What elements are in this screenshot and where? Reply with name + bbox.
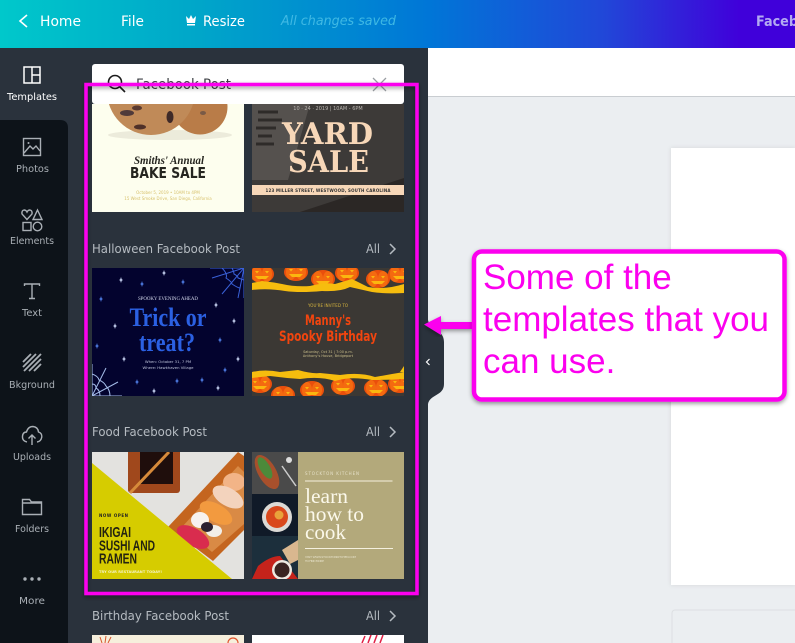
nav item: photos: Photos — [16, 164, 49, 175]
menu: home: Home — [40, 14, 81, 30]
template card: birthday right, cropped — [252, 635, 404, 643]
wooden sushi tray — [168, 452, 244, 561]
cook eyebrow: STOCKTON KITCHEN — [305, 471, 359, 476]
trick or treat headline: Trick or — [130, 303, 206, 332]
template card: bake sale — [92, 104, 244, 212]
icon: clear search — [373, 78, 386, 91]
arrow pointing to templates — [424, 316, 472, 335]
nav item: photos — [16, 138, 49, 175]
section heading: food: Food Facebook Post — [92, 425, 207, 439]
menu: file: File — [121, 14, 144, 30]
template card: trick or treat — [92, 268, 244, 396]
soy sauce dish — [128, 448, 180, 493]
pumpkins: bottom — [252, 376, 404, 396]
sushi eyebrow: NOW OPEN — [99, 513, 128, 518]
template card: learn how to cook: TO FIND MORE — [304, 559, 324, 563]
section heading: halloween — [92, 242, 395, 256]
yard sale headline: YARD — [281, 117, 373, 152]
callout text: Some of the — [483, 258, 672, 297]
next blank page outline — [672, 610, 795, 643]
nav item: more: More — [19, 596, 45, 607]
callout — [474, 252, 784, 400]
yellow ribbon: top — [252, 279, 404, 293]
template card: trick or treat: treat? — [139, 328, 195, 357]
nav item: text — [21, 284, 42, 319]
spider web: bottom left — [92, 364, 122, 396]
icon: collapse chevron — [426, 359, 430, 365]
stars — [95, 270, 240, 394]
template card: sushi — [92, 448, 247, 579]
template card: yard sale: 123 MILLER STREET, WESTWOOD, SOUTH CAROLINA — [266, 188, 391, 193]
icon: back chevron — [20, 15, 27, 27]
template card: yard sale — [252, 104, 404, 212]
sushi pieces — [223, 473, 245, 491]
callout text: templates that you — [483, 300, 769, 339]
nav item: folders: Folders — [15, 524, 49, 535]
icon: crown — [186, 15, 196, 26]
bake sale script line: Smiths' Annual — [134, 153, 205, 167]
template card: spooky birthday: Spooky Birthday — [279, 329, 377, 345]
pumpkins: top — [252, 268, 404, 288]
chopsticks — [130, 452, 169, 493]
template card: sushi: RAMEN — [99, 550, 137, 568]
search box — [92, 64, 404, 104]
section heading: birthday: All — [366, 609, 380, 623]
section heading: birthday — [92, 609, 395, 623]
nav item: background — [9, 354, 55, 391]
template card: birthday left, cropped — [92, 635, 244, 643]
section heading: halloween: Halloween Facebook Post — [92, 242, 240, 256]
template card: sushi: TRY OUR RESTAURANT TODAY! — [99, 570, 162, 574]
sushi headline: IKIGAI — [99, 524, 131, 541]
nav item: uploads — [13, 426, 51, 463]
template card: spooky birthday — [252, 268, 404, 396]
template card: spooky birthday: Anthony's House, Bridgeport — [303, 354, 354, 358]
template card: yard sale: SALE — [288, 145, 369, 180]
food photo: bottom — [252, 536, 298, 579]
nav item: elements — [10, 210, 54, 247]
template card: yard sale: 10 · 24 · 2019 | 10AM - 6PM — [293, 106, 363, 112]
nav item: templates: Templates — [6, 92, 57, 103]
icon: search — [108, 76, 125, 92]
nav item: folders — [15, 500, 49, 535]
yard sale address band — [252, 185, 404, 195]
cook headline: learn — [305, 484, 348, 508]
blank design page — [671, 148, 795, 585]
birthday headline: Manny's — [305, 313, 351, 329]
nav item: uploads: Uploads — [13, 452, 51, 463]
save status: All changes saved — [280, 13, 396, 29]
canvas workspace — [428, 48, 795, 643]
template card: sushi: SUSHI AND — [99, 538, 155, 554]
section heading: food — [92, 425, 395, 439]
highlight frame around templates — [86, 84, 417, 594]
template card: trick or treat: Where: Hawkhaven Village — [143, 365, 194, 370]
template card: trick or treat: When: October 31, 7 PM — [145, 359, 191, 364]
nav item: text: Text — [21, 308, 42, 319]
nav item: elements: Elements — [10, 236, 54, 247]
template card: learn how to cook — [250, 451, 404, 580]
spooky eyebrow: SPOOKY EVENING AHEAD — [138, 297, 198, 302]
nav item: templates — [6, 67, 57, 103]
section heading: halloween: All — [366, 242, 380, 256]
callout text: can use. — [483, 342, 615, 381]
section heading: food: All — [366, 425, 380, 439]
templates panel background — [0, 48, 428, 643]
food photo: middle — [252, 494, 298, 536]
template card: learn how to cook: VISIT WWW.STOCKTONKITCHEN.COM — [305, 555, 356, 559]
spider web: top right — [210, 268, 244, 298]
menu: resize: Resize — [203, 14, 245, 30]
template card: bake sale: 15 West Smoke Drive, San Diego, California — [124, 196, 212, 201]
panel collapse tab — [426, 320, 444, 404]
template card: spooky birthday: Saturday, Oct 31 | 7:00 p.m. — [303, 350, 353, 354]
left sidebar — [0, 67, 68, 643]
bake sale details: October 5, 2019 • 10AM to 4PM — [136, 190, 200, 195]
food photo: top — [252, 452, 298, 494]
template card: learn how to cook: cook — [305, 520, 346, 544]
top toolbar — [0, 0, 795, 48]
yellow ribbon: bottom — [252, 366, 404, 381]
nav item: background: Bkground — [9, 380, 55, 391]
birthday eyebrow: YOU'RE INVITED TO — [307, 303, 348, 308]
search query: Facebook Post — [136, 77, 231, 93]
nav item: more — [19, 577, 45, 607]
yellow triangle — [92, 463, 232, 579]
section heading: birthday: Birthday Facebook Post — [92, 609, 229, 623]
template card: learn how to cook: how to — [305, 502, 364, 526]
bake sale heading: BAKE SALE — [130, 164, 206, 182]
